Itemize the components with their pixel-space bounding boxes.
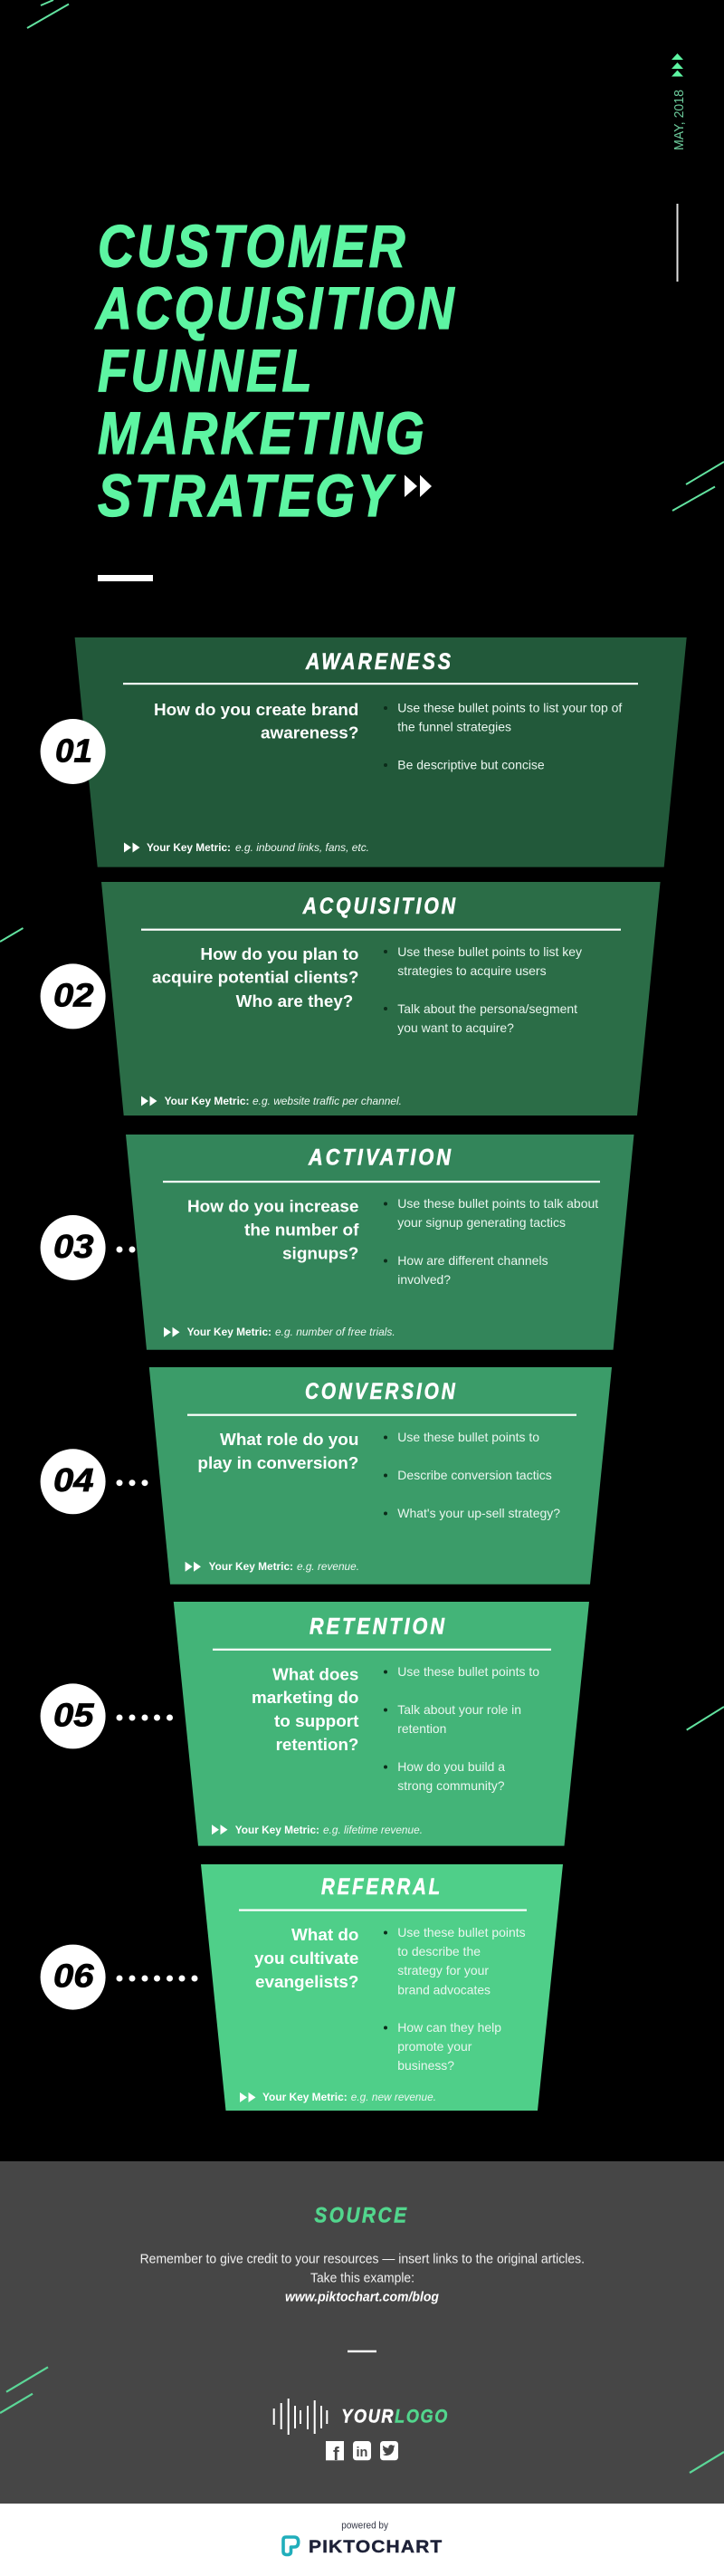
logo: piktochart mark [283, 2537, 299, 2555]
logo wordmark: YOURLOGO [341, 2406, 449, 2428]
question [154, 701, 358, 742]
bullet list: to describe the [397, 1944, 481, 1958]
question: What does [272, 1665, 358, 1683]
icon: linkedin: in [357, 2446, 367, 2460]
key metric: Your Key Metric: [187, 1326, 272, 1338]
bullet list: Be descriptive but concise [397, 758, 545, 772]
source text [140, 2251, 585, 2305]
bullet list: your signup generating tactics [397, 1215, 566, 1230]
bullet list: What's your up-sell strategy? [397, 1506, 560, 1520]
bullet list: How are different channels [397, 1253, 548, 1268]
panel: referral [201, 1864, 563, 2111]
number badge 03: 03 [53, 1228, 94, 1265]
bullet list: Talk about the persona/segment [397, 1001, 577, 1016]
bullet list: the funnel strategies [397, 719, 511, 733]
question: How do you increase [187, 1197, 358, 1215]
question [152, 945, 358, 1010]
key metric: e.g. new revenue. [351, 2091, 436, 2103]
icon: twitter [380, 2441, 398, 2460]
bullet list: Use these bullet points to [397, 1664, 539, 1679]
key metric: Your Key Metric: [262, 2091, 348, 2103]
question: you cultivate [254, 1949, 358, 1968]
panel: powered by [0, 2504, 724, 2576]
number badge 04 [41, 1449, 106, 1514]
question [252, 1665, 358, 1754]
heading: retention: RETENTION [310, 1614, 447, 1639]
key metric [124, 841, 369, 854]
bullet list: Describe conversion tactics [397, 1468, 552, 1482]
title: CUSTOMER [98, 213, 408, 280]
key metric: Your Key Metric: [235, 1824, 319, 1836]
number badge 05 [41, 1683, 106, 1748]
key metric [141, 1095, 402, 1107]
panel: activation [126, 1135, 634, 1350]
title: FUNNEL [98, 337, 315, 404]
question: signups? [282, 1244, 358, 1262]
number badge 02 [41, 963, 106, 1029]
bullet list: Use these bullet points to talk about [397, 1196, 598, 1211]
question: play in conversion? [197, 1454, 358, 1472]
connector dots 05 [116, 1715, 173, 1720]
bullet list: How do you build a [397, 1759, 505, 1774]
question: acquire potential clients? [152, 969, 358, 987]
number badge 02: 02 [53, 976, 94, 1014]
key metric: e.g. revenue. [297, 1560, 359, 1573]
bullet list [384, 1664, 539, 1793]
question: evangelists? [255, 1973, 358, 1991]
key metric: e.g. inbound links, fans, etc. [235, 841, 369, 854]
logo: piktochart wordmark: PIKTOCHART [309, 2538, 443, 2557]
heading: acquisition: ACQUISITION [302, 894, 458, 919]
bullet list: brand advocates [397, 1983, 491, 1997]
icon: title double arrow [405, 474, 432, 497]
bullet list: Use these bullet points to [397, 1430, 539, 1444]
connector dots 03 [116, 1246, 136, 1253]
question [254, 1926, 358, 1991]
key metric: Your Key Metric: [209, 1560, 293, 1573]
social icons [326, 2441, 398, 2465]
icon: facebook: f [333, 2445, 339, 2465]
key metric: Your Key Metric: [165, 1095, 250, 1107]
panel: source footer [0, 2161, 724, 2504]
bullet list: Talk about your role in [397, 1702, 521, 1717]
logo: your logo [274, 2399, 449, 2435]
bullet list [384, 701, 622, 772]
heading: awareness: AWARENESS [305, 649, 453, 675]
icon: stacked triangles [672, 53, 683, 76]
key metric [164, 1326, 395, 1338]
icon: sound wave [274, 2399, 327, 2435]
question: How do you plan to [200, 945, 358, 963]
heading: conversion: CONVERSION [305, 1379, 458, 1404]
bullet list: strategies to acquire users [397, 963, 547, 978]
question [197, 1431, 358, 1472]
question: retention? [276, 1736, 358, 1754]
date: MAY, 2018 [672, 90, 687, 150]
number badge 01: 01 [55, 732, 92, 770]
connector dots 06 [116, 1976, 197, 1981]
bullet list: How can they help [397, 2020, 501, 2035]
question: Who are they? [236, 992, 353, 1010]
bullet list [384, 1196, 598, 1287]
heading: referral: REFERRAL [321, 1874, 443, 1900]
question: awareness? [261, 724, 358, 742]
panel: retention [174, 1602, 589, 1846]
date marker [672, 53, 687, 150]
bullet list: business? [397, 2058, 454, 2073]
question [187, 1197, 359, 1262]
bullet list: involved? [397, 1272, 451, 1287]
panel: awareness [75, 637, 687, 867]
powered by label: powered by [341, 2521, 388, 2532]
number badge 03 [41, 1215, 106, 1280]
number badge 01 [41, 719, 106, 784]
key metric: e.g. website traffic per channel. [252, 1095, 402, 1107]
source text: www.piktochart.com/blog [285, 2290, 439, 2305]
title: ACQUISITION [94, 274, 457, 341]
bullet list [384, 1430, 560, 1520]
heading: source: SOURCE [314, 2203, 409, 2227]
heading: activation: ACTIVATION [308, 1145, 453, 1171]
question: How do you create brand [154, 701, 358, 719]
bullet list: promote your [397, 2039, 472, 2054]
bullet list: strategy for your [397, 1963, 489, 1977]
question: marketing do [252, 1689, 358, 1707]
question: the number of [244, 1221, 359, 1239]
connector dots 04 [116, 1480, 148, 1486]
question: What role do you [220, 1431, 358, 1449]
number badge 04: 04 [53, 1461, 94, 1499]
panel: acquisition [101, 882, 661, 1116]
key metric [212, 1824, 423, 1836]
bullet list [384, 944, 582, 1035]
bullet list: strong community? [397, 1778, 505, 1793]
key metric [240, 2091, 436, 2103]
number badge 05: 05 [53, 1697, 95, 1733]
key metric: e.g. number of free trials. [275, 1326, 395, 1338]
number badge 06 [41, 1945, 106, 2010]
key metric [186, 1560, 359, 1573]
title: MARKETING [98, 399, 427, 466]
source text: Take this example: [310, 2270, 414, 2285]
title: STRATEGY [98, 462, 395, 529]
bullet list [384, 1925, 526, 2073]
title [94, 213, 457, 529]
bullet list: you want to acquire? [397, 1020, 514, 1035]
bullet list: retention [397, 1721, 446, 1736]
number badge 06: 06 [53, 1958, 95, 1994]
question: What do [291, 1926, 358, 1944]
panel: conversion [149, 1367, 612, 1585]
bullet list: Use these bullet points to list your top of [397, 701, 622, 715]
key metric: e.g. lifetime revenue. [323, 1824, 423, 1836]
source text: Remember to give credit to your resources — insert links to the original articles. [140, 2251, 585, 2267]
bullet list: Use these bullet points to list key [397, 944, 582, 959]
bullet list: Use these bullet points [397, 1925, 526, 1939]
question: to support [274, 1712, 358, 1730]
key metric: Your Key Metric: [147, 841, 231, 854]
